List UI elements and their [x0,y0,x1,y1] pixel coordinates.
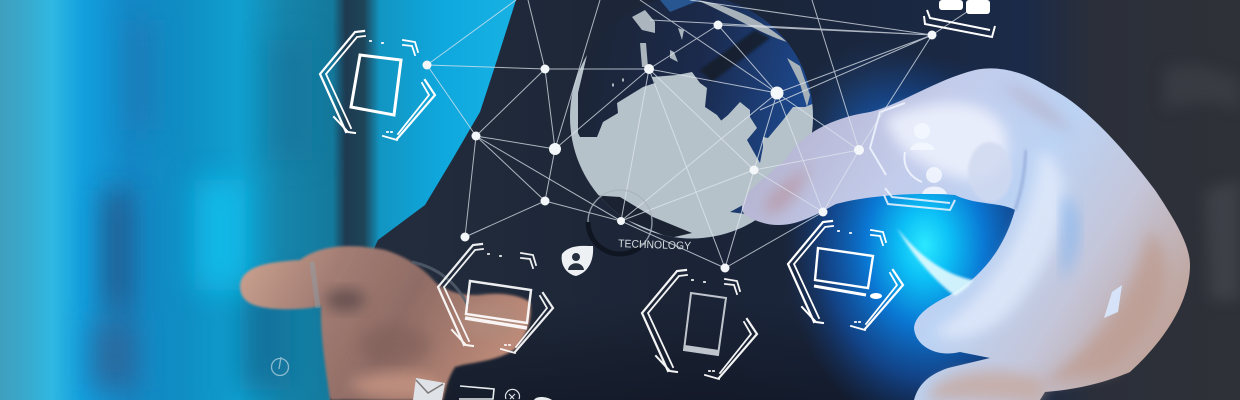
cuff shadow [412,262,468,306]
icon: cropped tab [534,397,552,400]
technology label: TECHNOLOGY [618,238,692,253]
icon: user badge [562,246,593,276]
hexagon: tablet [320,31,435,140]
pointing right hand [742,68,1190,400]
ocean [624,0,813,238]
hexagon: users on finger [870,103,955,210]
hexagon: laptop with cloud [788,221,903,330]
focus ring around technology label [588,190,652,254]
land mass [560,50,815,240]
blue glow [780,40,1065,400]
small island [730,205,745,214]
top rim [697,0,787,42]
icon: envelope [413,378,445,400]
network lines [427,0,985,268]
dark diagonal shadow on ocean [700,30,770,82]
hexagon: top icons cropped [924,0,995,37]
dark suit jacket [330,0,1240,400]
crease between fingers [1015,150,1026,210]
islands [612,80,624,85]
icon: close circle [505,389,520,399]
northern coast [632,10,684,67]
hexagon: laptop on palm [438,244,553,353]
icon: folder [459,386,494,399]
icon: power [272,357,288,376]
suit shading [340,65,1240,400]
fingernail [968,142,1012,202]
globe [560,0,815,240]
finger highlights [764,82,1166,400]
lower dark coast [599,196,692,237]
left open hand [240,246,531,400]
right rim [787,58,810,107]
white arc beneath finger [897,228,973,296]
hexagon: smartphone [642,270,757,379]
white gap under hand [1104,285,1122,318]
network nodes [422,20,936,272]
